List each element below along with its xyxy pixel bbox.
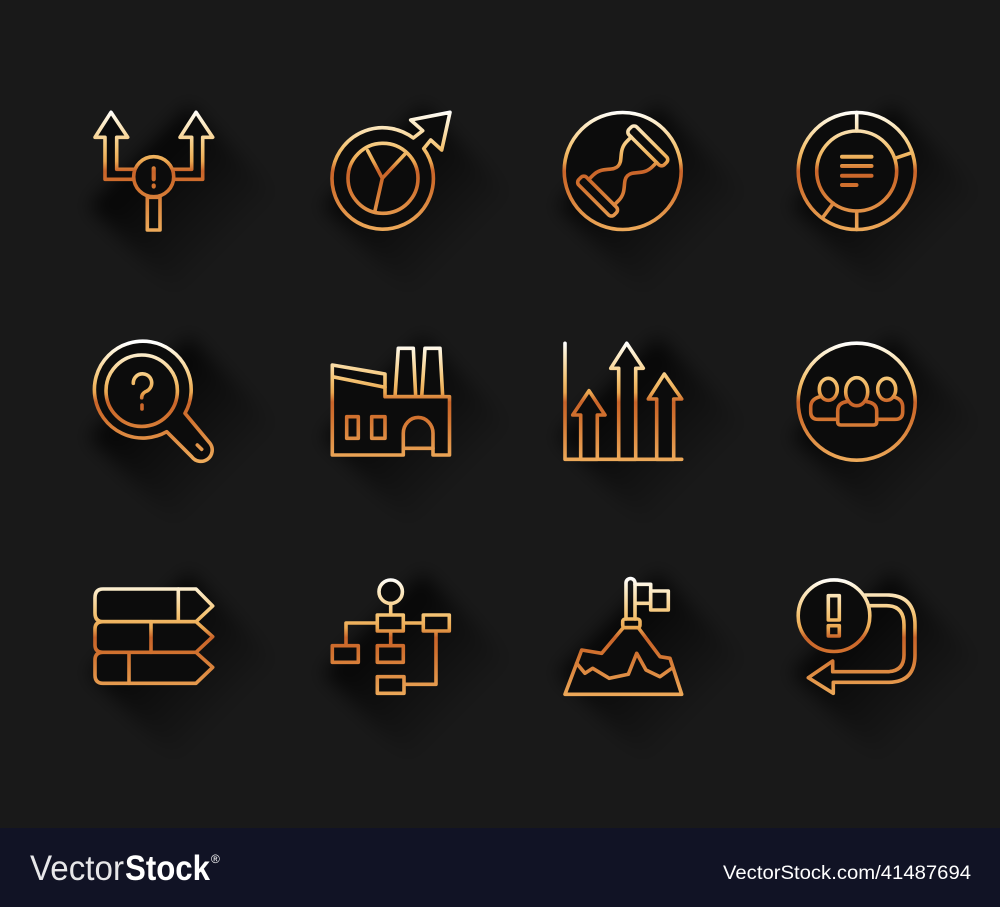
icon: group of people in circle [798, 343, 915, 460]
icon: two arrows with warning [95, 112, 213, 230]
logo: VectorStock: ® [211, 852, 220, 866]
icon: donut chart with text [798, 112, 915, 230]
icon: magnifier with question mark [94, 341, 212, 461]
icon: factory [332, 348, 450, 455]
icon: pie chart with arrow [332, 112, 450, 229]
icon: growth chart with arrows [565, 343, 682, 459]
icon: stacked arrow bars [95, 589, 213, 683]
icon: warning with return arrow [798, 580, 915, 693]
icon: flowchart [332, 580, 449, 693]
icon: hourglass in circle [564, 112, 681, 230]
image id text: VectorStock.com/41487694 [723, 863, 971, 884]
icon: mountain with flag [565, 578, 682, 694]
logo: VectorStock: Stock [125, 849, 210, 888]
logo: VectorStock: Vector [30, 849, 124, 888]
footer bar [0, 828, 1000, 907]
long shadows [89, 106, 982, 763]
logo: VectorStock [30, 849, 220, 888]
